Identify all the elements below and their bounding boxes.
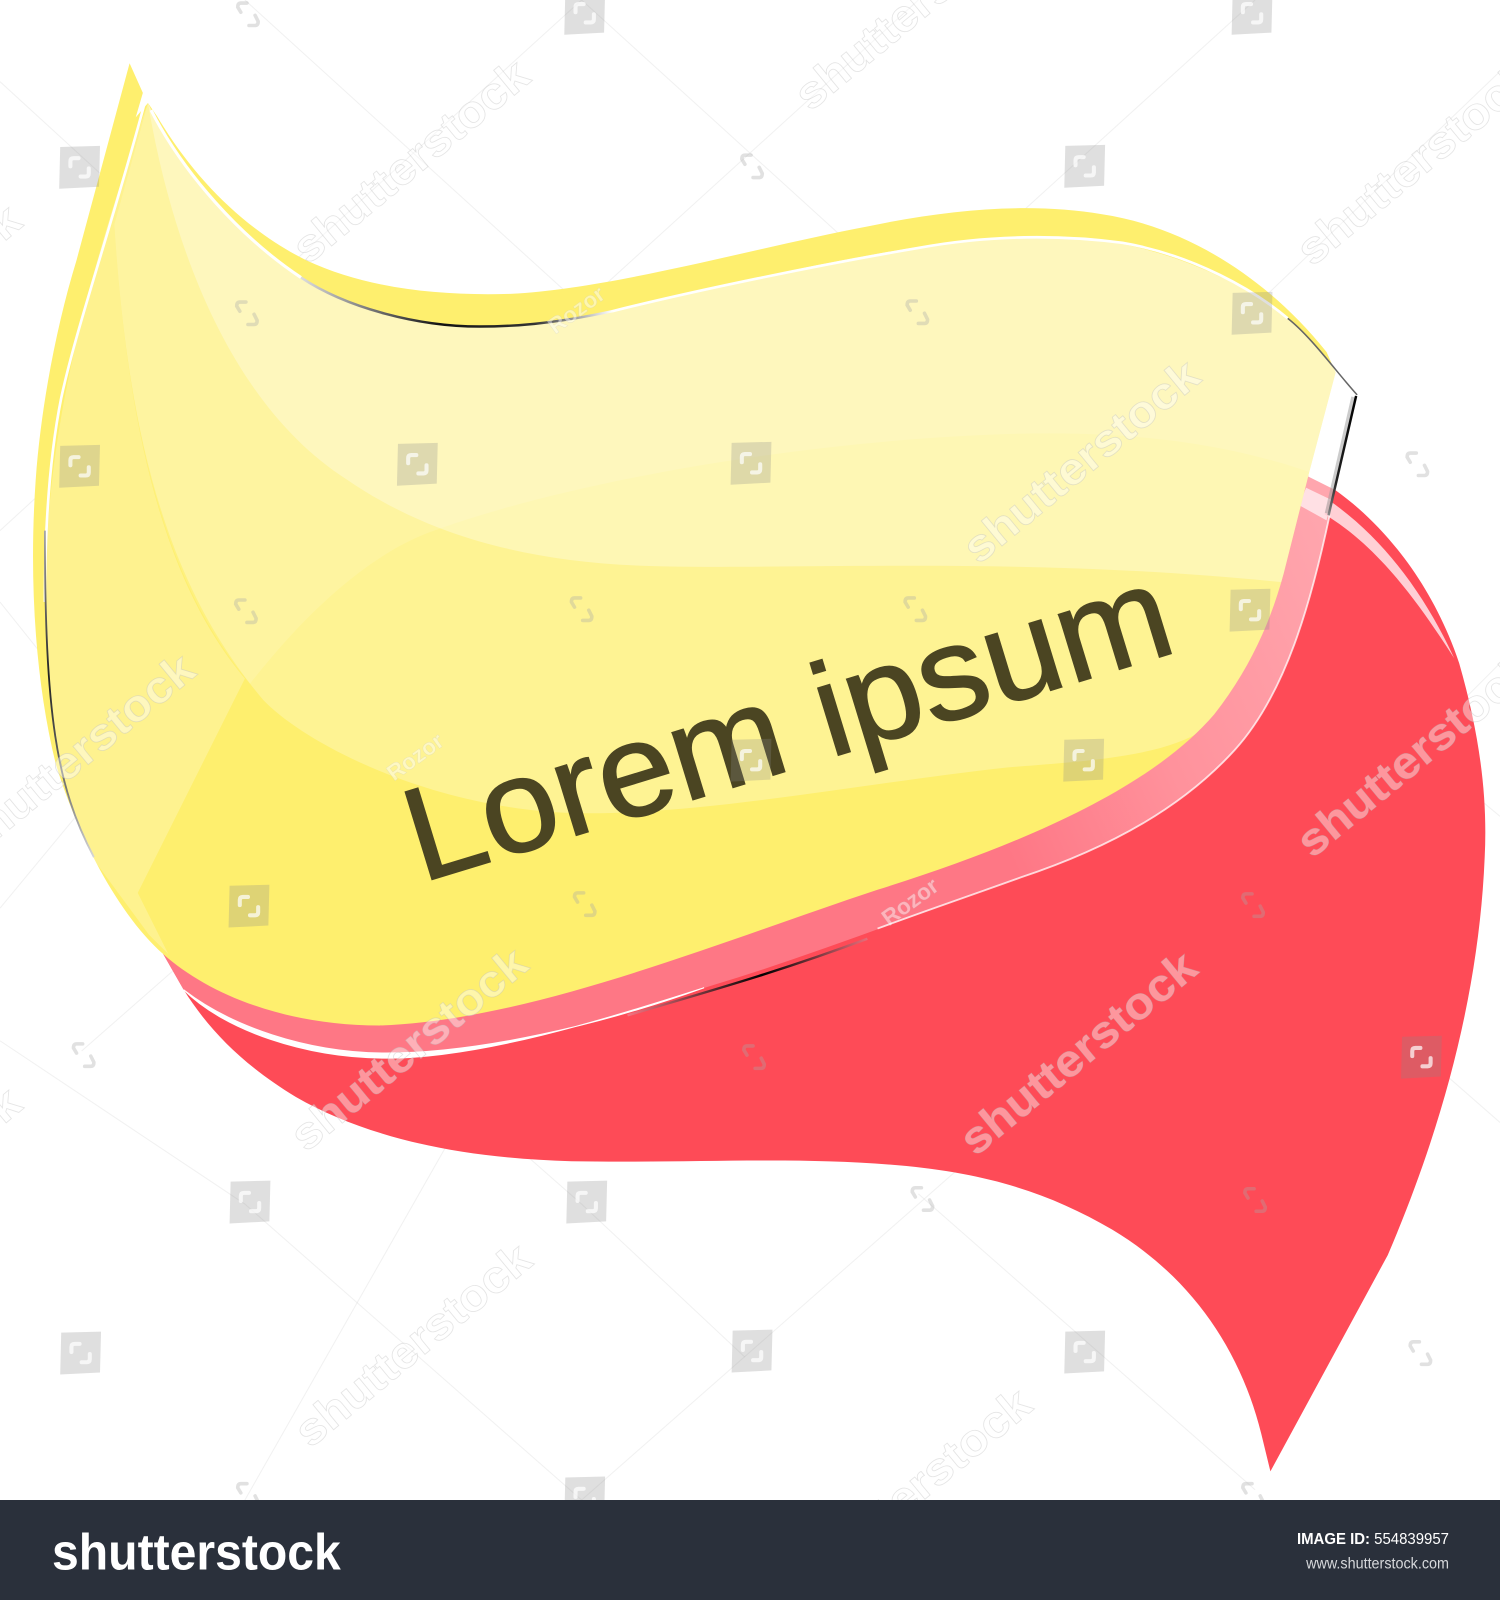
glass edge highlights and shadows	[45, 102, 1357, 1015]
footer logo: shutterstock	[52, 1523, 341, 1580]
footer url: www.shutterstock.com	[1305, 1555, 1449, 1572]
shape: glass facets over yellow	[31, 61, 1367, 954]
shape: white glass corner gap at right	[1308, 372, 1357, 490]
watermark layer: shutterstock	[949, 941, 1206, 1165]
watermark layer: Rozor	[543, 281, 610, 339]
watermark layer: shutterstock	[282, 49, 539, 273]
shape: yellow front ribbon	[33, 63, 1336, 1026]
facet: left pale area	[31, 103, 245, 954]
shape: translucent glass band over red	[163, 474, 1454, 1058]
watermark layer: shutterstock	[784, 1377, 1041, 1600]
watermark layer: Rozor	[877, 873, 943, 931]
watermark layer: shutterstock	[952, 349, 1209, 573]
footer bar	[0, 1500, 1500, 1600]
facet: soft wave band	[114, 61, 1367, 684]
footer image id: IMAGE ID: 554839957	[1297, 1531, 1449, 1548]
shape: red back ribbon	[163, 474, 1485, 1471]
facet: top lightest layer	[148, 104, 1336, 582]
facet: upper mid layer	[114, 61, 1367, 813]
watermark layer: shutterstock	[284, 1232, 541, 1457]
watermark layer: Rozor	[382, 728, 448, 786]
heading text: Lorem ipsum: Lorem ipsum	[387, 537, 1188, 910]
watermark layer: shutterstock	[280, 936, 537, 1161]
